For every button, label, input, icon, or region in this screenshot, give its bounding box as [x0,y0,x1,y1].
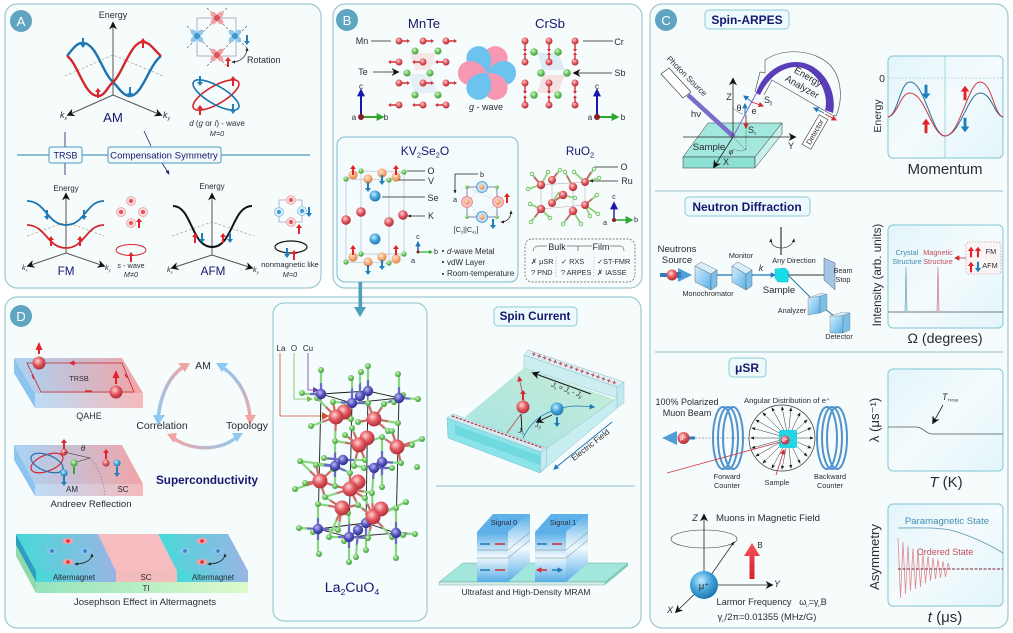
ARPES setup: Detector [804,117,826,146]
panel: La2CuO4 crystal: 4 [374,587,379,597]
neutron diffractometer: Source [662,255,692,266]
asymmetry chart: Asymmetry [867,524,882,590]
AFM nonmagnetic-like: M=0 [283,270,297,279]
neutron diffractometer: k [759,263,764,273]
TRSB and compensation symmetry bar: TRSB [53,150,78,160]
spin current device: α [567,390,571,396]
panel: KV2Se2O: vdW Layer [447,258,486,267]
panel: KV2Se2O: 2 [461,230,464,234]
muon in magnetic field: μ [722,618,725,622]
muon in magnetic field: μ [806,602,809,608]
ARPES setup: Energy [792,65,824,90]
AM correlation topology triangle [136,360,269,448]
muon beam setup: Counter [714,481,741,490]
RuO2 structure: RuO [566,145,590,158]
neutron intensity chart: Crystal [896,248,919,257]
muon in magnetic field: B [757,541,763,550]
panel: KV2Se2O: a [453,195,458,204]
AFM nonmagnetic-like [261,196,319,279]
MnTe structure: c [359,82,363,91]
panel: KV2Se2O: Se [427,193,439,203]
ARPES setup: Photon Source [665,54,709,99]
ARPES energy-momentum chart: 0 [879,73,885,85]
Josephson effect slab: TI [142,584,150,593]
muon beam setup [655,396,847,490]
spin current device: α [522,430,525,436]
neutron intensity chart: Structure [892,257,922,266]
AFM nonmagnetic-like: nonmagnetic like [261,260,319,269]
panel: KV2Se2O: b [434,247,438,256]
muon beam setup: Muon Beam [663,408,711,418]
panel: KV2Se2O: c [416,232,420,241]
AM band diagram: k [60,110,64,120]
TRSB and compensation symmetry bar [17,131,310,175]
muon beam setup: Angular Distribution of e⁺ [744,396,830,405]
Josephson effect slab: Altermagnet [53,573,96,582]
techniques table: Bulk and Film: Film [592,242,610,252]
muon in magnetic field: B [821,597,827,607]
ARPES setup: Sample [693,142,725,153]
d-wave spin ellipses: d (g or i) - wave [189,119,245,128]
neutron diffractometer: Monochromator [682,289,734,298]
AM band diagram: k [163,110,168,120]
AM correlation topology triangle: Correlation [136,420,188,432]
muon beam setup: Backward [814,472,846,481]
lambda vs T chart: T [942,392,948,402]
MnTe structure: MnTe [408,16,440,31]
panel: KV2Se2O: K [428,211,434,221]
g-wave clover: g - wave [469,102,503,112]
AM band diagram: x [64,116,68,122]
spin current device: ++++++++++++++++ [530,351,619,388]
panel: KV2Se2O: a [411,256,416,265]
FM s-wave: M≠0 [124,270,138,279]
heading: Neutron Diffraction [685,197,810,216]
panel C: experimental probes [650,4,1008,628]
FM band diagram: y [108,268,112,272]
spin current device: s [553,385,557,391]
QAHE slab [14,342,143,421]
MRAM device: Signal 1 [550,518,576,527]
ARPES setup: S [748,125,754,135]
spin current device: J [550,380,557,390]
ARPES setup: e [751,106,757,116]
panel B: candidate materials [333,4,642,288]
panel: KV2Se2O: 2 [417,150,421,160]
muon in magnetic field: Muons in Magnetic Field [716,513,820,524]
spin current device: - J [569,387,582,399]
muon in magnetic field: μ [818,602,821,608]
AM band diagram: y [166,116,170,122]
muon beam setup: e⁺ [782,437,788,444]
ARPES setup [661,52,840,168]
heading: muSR: μSR [735,361,759,375]
MRAM device: Signal 0 [491,518,517,527]
muon in magnetic field: /2π=0.01355 (MHz/G) [725,611,816,622]
muon beam setup: Forward [714,472,740,481]
FM s-wave: s - wave [117,261,145,270]
panel: KV2Se2O: Se [421,144,436,158]
CrSb structure: CrSb [535,16,565,31]
panel: KV2Se2O: 4z [472,230,476,234]
spin current device: Electric Field [570,427,611,463]
AFM band diagram: AFM [201,265,225,278]
techniques table: Bulk and Film: ? ARPES [561,268,592,277]
panel: La2CuO4 crystal: O [291,344,297,353]
CrSb structure: b [621,113,626,122]
RuO2 structure: 2 [590,150,594,160]
heading: Spin-ARPES [705,10,789,29]
heading: muSR [729,358,766,377]
MnTe structure [352,16,457,122]
asymmetry chart: Ordered State [917,547,973,557]
neutron diffractometer: Stop [835,275,851,284]
muon beam setup: Counter [817,481,844,490]
panel: KV2Se2O: [C [454,225,461,234]
panel: KV2Se2O: O [427,166,435,176]
neutron diffractometer: Monitor [729,251,754,260]
muon in magnetic field: Z [691,513,698,523]
panel: KV2Se2O: O [440,144,449,158]
spin current device [447,350,624,473]
FM band diagram [22,184,112,278]
d-wave spin ellipses: M=0 [210,129,224,138]
neutron diffractometer [658,227,853,341]
Josephson effect slab: Josephson Effect in Altermagnets [74,597,216,608]
Superconductivity heading: Superconductivity [156,474,258,487]
badge C: C [661,13,671,28]
muon in magnetic field: μ⁺ [699,581,709,592]
asymmetry chart [867,504,1003,626]
MnTe structure: a [352,113,357,122]
panel: KV2Se2O: 2 [436,150,440,160]
AM orbital rotation diagram [187,8,281,67]
FM band diagram: k [105,263,109,272]
panel: KV2Se2O: Room-temperature [447,269,515,278]
Andreev reflection slab: AM [66,485,78,494]
spin current device: β [538,424,542,430]
muon in magnetic field: ω [799,597,806,607]
CrSb structure: Cr [614,37,624,47]
ARPES setup: S [764,95,770,105]
Andreev reflection slab: SC [117,485,129,494]
neutron intensity chart: Intensity (arb. units) [871,224,884,326]
panel: La2CuO4 crystal: CuO [345,580,374,596]
AM orbital rotation diagram: Rotation [247,55,281,65]
MRAM device [439,514,628,597]
Andreev reflection slab: Andreev Reflection [50,499,132,510]
neutron diffractometer: Beam [833,266,853,275]
muon in magnetic field: Y [774,579,781,589]
neutron diffractometer: Neutrons [658,244,697,255]
AFM band diagram: Energy [199,182,225,191]
ARPES setup: θ [736,103,742,113]
AFM band diagram: k [167,265,171,274]
neutron intensity chart [871,224,1003,347]
spin current device: J [518,426,522,435]
AM band diagram: AM [103,110,123,125]
MnTe structure: Te [358,67,368,77]
ARPES energy-momentum chart: Energy [872,99,884,133]
AFM band diagram: x [170,270,174,274]
neutron intensity chart: AFM [982,261,998,270]
MnTe structure: Mn [356,36,368,46]
neutron diffractometer: Analyzer [778,306,807,315]
panel: KV2Se2O: ] [476,225,478,234]
muon in magnetic field: Larmor Frequency [716,597,792,607]
muon in magnetic field: =γ [809,597,819,607]
g-wave clover [458,42,516,112]
ARPES setup: z [754,130,757,136]
panel A: altermagnet band structures [5,4,321,288]
lambda vs T chart: TRSB [948,398,958,402]
panel: KV2Se2O: b [480,170,484,179]
ARPES setup: ∥ [770,100,772,106]
FM band diagram: FM [58,265,74,278]
CrSb structure: c [595,82,599,91]
badge B [336,9,358,31]
muon beam setup: 100% Polarized [655,397,719,407]
ARPES setup: φ [729,147,734,156]
AM correlation topology triangle: AM [195,360,211,372]
panel: La2CuO4 crystal [273,303,427,621]
ARPES setup: Analyzer [783,73,821,102]
techniques table: Bulk and Film [525,239,635,282]
divider [655,191,1003,352]
badge B: B [343,13,352,28]
CrSb structure: Sb [614,68,626,78]
panel: KV2Se2O [337,137,518,282]
FM band diagram: k [22,263,26,272]
neutron diffractometer: Any Direction [772,256,816,265]
Josephson effect slab: Altermagnet [192,573,235,582]
ARPES energy-momentum chart [872,56,1003,178]
heading: Spin Current [494,307,577,326]
panel: KV2Se2O: V [428,176,434,186]
RuO2 structure: b [634,215,638,224]
Josephson effect slab: SC [140,573,152,582]
RuO2 structure [526,145,638,227]
badge C [655,9,677,31]
d-wave spin ellipses [189,74,245,138]
techniques table: Bulk and Film: ✓ST-FMR [597,257,630,266]
AM correlation topology triangle: Topology [226,420,269,432]
FM band diagram: Energy [53,184,79,193]
techniques table: Bulk and Film: ✓ RXS [561,257,584,266]
panel: La2CuO4 crystal: La [277,344,286,353]
panel: KV2Se2O: d-wave Metal [447,247,495,256]
muon in magnetic field: γ [718,611,722,622]
panel: La2CuO4 crystal: Cu [303,344,313,353]
QAHE slab: TRSB [69,374,89,383]
MnTe structure: b [384,113,389,122]
AFM band diagram: y [256,270,260,274]
Josephson effect slab [16,534,248,608]
CrSb structure: a [588,113,593,122]
Andreev reflection slab: θ [81,444,86,453]
QAHE slab: QAHE [76,411,102,421]
neutron diffractometer: Sample [763,285,795,296]
techniques table: Bulk and Film: ? PND [531,268,552,277]
neutron intensity chart: FM [986,247,996,256]
panel: La2CuO4 crystal: 2 [341,587,346,597]
RuO2 structure: a [603,218,608,227]
techniques table: Bulk and Film: Bulk [548,242,566,252]
MRAM device: Ultrafast and High-Density MRAM [462,587,590,597]
techniques table: Bulk and Film: ✗ μSR [531,257,553,266]
heading: Neutron Diffraction: Neutron Diffraction [692,200,802,214]
neutron intensity chart: Magnetic [923,248,953,257]
RuO2 structure: Ru [621,176,633,186]
ARPES energy-momentum chart: Momentum [907,161,983,178]
panel D: phenomena and applications [5,297,641,628]
heading: Spin Current: Spin Current [500,310,570,323]
panel: KV2Se2O: ||C [463,225,472,234]
CrSb structure [522,16,626,122]
badge A: A [17,14,26,29]
ARPES setup: hν [691,109,701,120]
muon in magnetic field [666,513,827,622]
ARPES setup: X [723,157,729,167]
badge D [10,305,32,327]
muon in magnetic field: X [666,605,674,615]
spin current device: = J [555,382,570,394]
ARPES setup: Y [788,141,794,151]
neutron intensity chart: Structure [923,257,953,266]
badge A [10,10,32,32]
techniques table: Bulk and Film: ✗ IASSE [597,268,627,277]
asymmetry chart: t (μs) [928,609,962,626]
lambda vs T chart [867,369,1003,491]
TRSB and compensation symmetry bar: Compensation Symmetry [110,150,218,162]
AFM band diagram [167,182,260,278]
AM band diagram: Energy [99,10,128,20]
muon beam setup: μ⁺ [680,435,686,442]
neutron diffractometer: Detector [825,332,853,341]
spin current device: β [577,394,583,400]
heading: Spin-ARPES: Spin-ARPES [711,13,783,27]
panel: KV2Se2O: KV [401,144,417,158]
panel: La2CuO4 crystal: La [325,580,341,596]
Andreev reflection slab [14,439,143,510]
lambda vs T chart: T (K) [929,474,963,491]
AM band diagram [60,10,170,125]
lambda vs T chart: λ (μs⁻¹) [867,398,882,442]
RuO2 structure: O [620,162,628,172]
FM s-wave [116,196,148,279]
RuO2 structure: c [612,192,616,201]
badge D: D [16,309,26,324]
arrow: KV2Se2O to La2CuO4 [354,282,366,317]
FM band diagram: x [25,268,29,272]
AFM band diagram: k [253,265,257,274]
asymmetry chart: Paramagnetic State [905,516,989,527]
muon beam setup: Sample [765,478,789,487]
neutron intensity chart: Ω (degrees) [907,331,983,347]
spin current device: J [535,420,539,429]
ARPES setup: Z [726,92,732,102]
divider: spin current to MRAM [436,485,635,487]
